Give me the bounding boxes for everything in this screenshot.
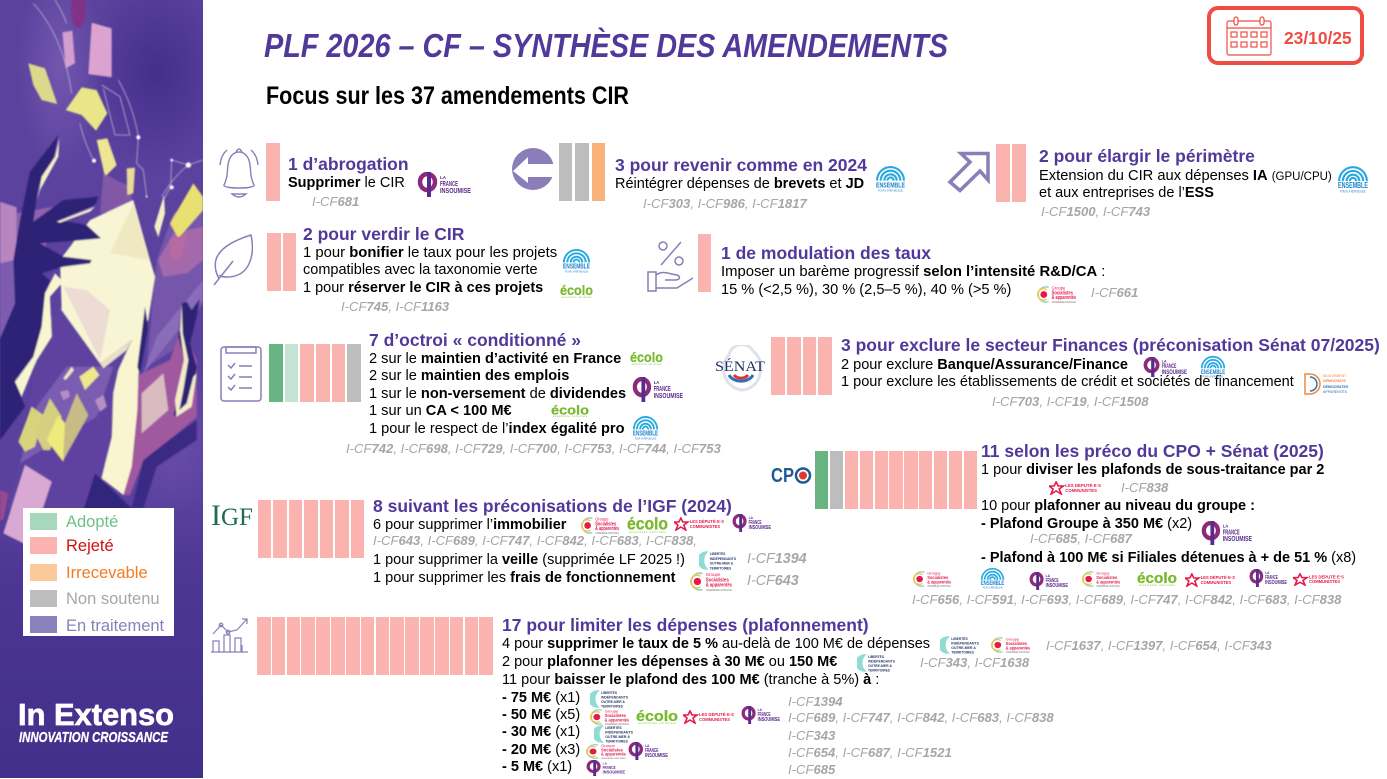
lower violet band bbox=[7, 307, 133, 508]
logo: Communistes bbox=[1293, 573, 1345, 586]
logo: LIOT: OUTRE-MER & bbox=[605, 735, 630, 739]
floating papers bbox=[88, 23, 112, 77]
text: 1 pour bonifier le taux pour les projets bbox=[303, 245, 557, 261]
logo: LIOT bbox=[594, 725, 635, 743]
icon: left arrow bbox=[512, 148, 554, 190]
logo: Ensemble bbox=[632, 415, 659, 440]
logo: Socialistes bbox=[580, 516, 620, 535]
text: 10 pour plafonner au niveau du groupe : bbox=[981, 498, 1255, 514]
status bars bbox=[266, 143, 280, 201]
logo: LIOT: OUTRE-MER & bbox=[601, 700, 625, 704]
logo: Ensemble bbox=[876, 166, 905, 192]
date badge bbox=[1207, 6, 1364, 65]
logo: LIOT: LIBERTÉS bbox=[868, 654, 884, 659]
text: - Plafond Groupe à 350 M€ (x2) bbox=[981, 516, 1192, 532]
references: I-CF685, I-CF687 bbox=[1030, 531, 1132, 546]
logo: Démocrates: APPARENTÉS bbox=[1323, 389, 1348, 394]
text: - Plafond à 100 M€ si Filiales détenues à + de 51 % (x8) bbox=[981, 550, 1356, 566]
text: 11 pour baisser le plafond des 100 M€ (tranche à 5%) à : bbox=[502, 672, 879, 688]
logo: Socialistes: ASSEMBLÉE NATIONALE bbox=[595, 532, 619, 535]
logo: La France Insoumise bbox=[418, 172, 471, 197]
icon: bell bbox=[219, 148, 259, 198]
references: I-CF343, I-CF1638 bbox=[920, 655, 1029, 670]
legend item: Irrecevable bbox=[30, 564, 148, 582]
logo: LIOT: LIBERTÉS bbox=[605, 725, 622, 730]
logo: La France Insoumise bbox=[628, 742, 668, 760]
logo: La France Insoumise: LA bbox=[1046, 574, 1051, 578]
icon: percent in hand bbox=[647, 241, 693, 292]
references: I-CF689, I-CF747, I-CF842, I-CF683, I-CF838 bbox=[788, 710, 1054, 725]
logo: Communistes bbox=[1049, 481, 1102, 495]
references: I-CF656, I-CF591, I-CF693, I-CF689, I-CF747, I-CF842, I-CF683, I-CF838 bbox=[912, 592, 1341, 607]
right wedge bbox=[147, 200, 203, 367]
logo: Socialistes bbox=[589, 708, 630, 726]
status bars bbox=[258, 500, 364, 558]
left pink band bbox=[0, 202, 17, 263]
status bars bbox=[269, 344, 361, 402]
heading: 2 pour élargir le périmètre bbox=[1039, 146, 1255, 166]
logo: La France Insoumise bbox=[632, 377, 683, 402]
logo: La France Insoumise: LA bbox=[654, 380, 660, 385]
logo: La France Insoumise: LA bbox=[749, 516, 754, 520]
legend item: Adopté bbox=[30, 513, 118, 531]
logo: La France Insoumise: FRANCE bbox=[1265, 575, 1278, 581]
logo: La France Insoumise bbox=[1201, 521, 1252, 545]
text: 2 sur le maintien d’activité en France bbox=[369, 351, 621, 367]
logo: Communistes bbox=[683, 710, 735, 724]
text: Réintégrer dépenses de brevets et JD bbox=[615, 176, 864, 192]
references: I-CF1394 bbox=[747, 551, 807, 567]
logo: LIOT: INDÉPENDANTS bbox=[605, 730, 633, 734]
panel: retour 2024 bbox=[512, 143, 905, 211]
logo: Socialistes bbox=[1036, 285, 1077, 304]
text: et aux entreprises de l’ESS bbox=[1039, 185, 1214, 201]
icon: calendar bbox=[1226, 16, 1272, 56]
legend item: Irrecevable: Irrecevable bbox=[66, 564, 148, 582]
logo: La France Insoumise: LA bbox=[1265, 571, 1270, 575]
legend item: Rejeté: Rejeté bbox=[66, 537, 114, 555]
logo: LIOT bbox=[857, 654, 897, 672]
logo: LIOT: OUTRE-MER & bbox=[710, 562, 733, 566]
logo: La France Insoumise bbox=[1029, 572, 1068, 590]
logo: Communistes: COMMUNISTES bbox=[1201, 580, 1231, 586]
logo: LIOT: OUTRE-MER & bbox=[868, 664, 892, 668]
heading: 2 pour verdir le CIR bbox=[303, 224, 464, 244]
logo: LIOT: LIBERTÉS bbox=[951, 636, 968, 641]
logo: Socialistes bbox=[1081, 570, 1121, 588]
logo: Socialistes bbox=[585, 743, 627, 760]
logo: Communistes: COMMUNISTES bbox=[1065, 488, 1098, 494]
logo: LIOT bbox=[699, 551, 738, 570]
text: 15 % (<2,5 %), 30 % (2,5–5 %), 40 % (>5 %) bbox=[721, 282, 1011, 298]
logo: La France Insoumise: LA bbox=[645, 744, 650, 748]
logo: Socialistes bbox=[912, 570, 952, 588]
references: I-CF1500, I-CF743 bbox=[1041, 204, 1150, 219]
logo: La France Insoumise: LA bbox=[603, 762, 608, 765]
heading: 7 d’octroi « conditionné » bbox=[369, 330, 581, 350]
text: 1 pour le respect de l’index égalité pro bbox=[369, 421, 625, 437]
logo: La France Insoumise bbox=[1143, 357, 1187, 377]
references: I-CF1637, I-CF1397, I-CF654, I-CF343 bbox=[1046, 638, 1272, 653]
heading: 3 pour revenir comme en 2024 bbox=[615, 155, 867, 175]
small lower items bbox=[79, 367, 99, 390]
logo: Socialistes bbox=[689, 571, 733, 592]
logo: La France Insoumise bbox=[732, 514, 771, 532]
logo: Socialistes bbox=[990, 636, 1031, 654]
logo: Ensemble bbox=[1338, 166, 1368, 193]
logo: Socialistes: Groupe bbox=[927, 571, 941, 575]
logo: La France Insoumise: FRANCE bbox=[645, 748, 659, 754]
legend item: Adopté: Adopté bbox=[66, 513, 118, 531]
icon: growth chart bbox=[210, 618, 249, 653]
status bars bbox=[267, 233, 296, 291]
logo: La France Insoumise: LA bbox=[758, 708, 763, 712]
text: 1 pour supprimer les frais de fonctionnement bbox=[373, 570, 676, 586]
logo: La France Insoumise: FRANCE bbox=[1046, 578, 1059, 584]
logo: Communistes bbox=[674, 517, 725, 531]
logo: La France Insoumise: LA bbox=[1223, 524, 1228, 529]
logo: Socialistes: ASSEMBLÉE NATIONALE bbox=[706, 587, 732, 592]
references: I-CF703, I-CF19, I-CF1508 bbox=[992, 394, 1148, 409]
logo: Socialistes: Groupe bbox=[1096, 571, 1110, 575]
references: I-CF1394 bbox=[788, 694, 843, 709]
status bars bbox=[996, 144, 1026, 202]
references: I-CF303, I-CF986, I-CF1817 bbox=[643, 196, 807, 211]
text: Supprimer le CIR bbox=[288, 175, 405, 191]
central crystal bbox=[60, 200, 155, 363]
text: 1 pour exclure les établissements de crédit et sociétés de financement bbox=[841, 374, 1294, 390]
logo: IGF: IGF bbox=[211, 499, 253, 532]
logo: LIOT: INDÉPENDANTS bbox=[951, 641, 979, 645]
logo: Socialistes: Groupe bbox=[1052, 286, 1066, 291]
heading: 17 pour limiter les dépenses (plafonnement) bbox=[502, 615, 869, 635]
left hand bbox=[0, 135, 101, 440]
legend item: Rejeté bbox=[30, 537, 114, 555]
icon: leaf bbox=[214, 234, 253, 286]
logo: Communistes bbox=[1185, 573, 1236, 587]
logo: LIOT: OUTRE-MER & bbox=[951, 646, 976, 650]
panel: secteur finances bbox=[715, 335, 1385, 412]
text: Extension du CIR aux dépenses IA (GPU/CPU) bbox=[1039, 168, 1332, 184]
logo: Ensemble bbox=[563, 249, 590, 273]
logo: La France Insoumise bbox=[741, 706, 780, 724]
text: 4 pour supprimer le taux de 5 % au-delà de 100 M€ de dépenses bbox=[502, 636, 930, 652]
panel: abrogation bbox=[219, 143, 471, 209]
legend item: En traitement: En traitement bbox=[66, 617, 164, 635]
logo: La France Insoumise: FRANCE bbox=[749, 520, 762, 526]
logo: La France Insoumise: FRANCE bbox=[758, 712, 771, 718]
text: 1 pour diviser les plafonds de sous-traitance par 2 bbox=[981, 462, 1324, 478]
text: - 30 M€ (x1) bbox=[502, 724, 580, 740]
text: 2 sur le maintien des emplois bbox=[369, 368, 569, 384]
logo: Socialistes: Groupe bbox=[1006, 637, 1020, 641]
text: 6 pour supprimer l’immobilier bbox=[373, 517, 566, 533]
logo: Ensemble bbox=[980, 567, 1005, 589]
logo: Ensemble bbox=[1200, 355, 1226, 378]
sidebar illustration bbox=[0, 0, 203, 778]
logo: CPO bbox=[771, 464, 812, 486]
panel: préconisations IGF bbox=[210, 495, 775, 595]
logo: LIOT bbox=[590, 690, 630, 708]
logo: La France Insoumise: LA bbox=[1162, 360, 1167, 364]
panel: CPO et Sénat bbox=[770, 440, 1370, 610]
status bars bbox=[257, 617, 493, 675]
references: I-CF643, I-CF689, I-CF747, I-CF842, I-CF683, I-CF838, bbox=[373, 533, 697, 548]
logo: La France Insoumise: FRANCE bbox=[440, 179, 458, 188]
status bars bbox=[771, 337, 832, 395]
panel: verdir le CIR bbox=[214, 224, 593, 314]
references: I-CF681 bbox=[312, 194, 359, 209]
references: I-CF685 bbox=[788, 762, 835, 777]
heading: 1 d’abrogation bbox=[288, 154, 409, 174]
logo: La France Insoumise bbox=[586, 760, 625, 776]
logo: Communistes: COMMUNISTES bbox=[690, 524, 720, 530]
references: I-CF643 bbox=[747, 573, 799, 589]
logo: La France Insoumise: FRANCE bbox=[1162, 364, 1176, 370]
panel: plafonnement des dépenses bbox=[210, 612, 1275, 778]
text: 2 pour plafonner les dépenses à 30 M€ ou 150 M€ bbox=[502, 654, 837, 670]
panel: modulation des taux bbox=[647, 234, 1138, 304]
text: 2 pour exclure Banque/Assurance/Finance bbox=[841, 357, 1128, 373]
text: 1 pour réserver le CIR à ces projets bbox=[303, 280, 543, 296]
logo: Socialistes: Groupe bbox=[595, 517, 609, 522]
logo: La France Insoumise: LA bbox=[440, 175, 447, 180]
text: - 75 M€ (x1) bbox=[502, 690, 580, 706]
sleeve bbox=[67, 473, 132, 633]
status bars bbox=[559, 143, 605, 201]
logo: Socialistes: Groupe bbox=[601, 744, 616, 748]
brand logo: In Extenso bbox=[18, 698, 174, 732]
references: I-CF343 bbox=[788, 728, 835, 743]
text: Imposer un barème progressif selon l’intensité R&D/CA : bbox=[721, 264, 1105, 280]
logo: Socialistes: Groupe bbox=[605, 709, 619, 713]
lower papers bbox=[63, 393, 88, 460]
text: 1 pour supprimer la veille (supprimée LF 2025 !) bbox=[373, 552, 685, 568]
legend item: En traitement bbox=[30, 616, 164, 635]
logo: Communistes: COMMUNISTES bbox=[1309, 579, 1340, 584]
right hand bbox=[123, 327, 197, 495]
text: - 20 M€ (x3) bbox=[502, 742, 580, 758]
references: I-CF654, I-CF687, I-CF1521 bbox=[788, 745, 952, 760]
logo: Socialistes: Groupe bbox=[706, 572, 721, 577]
icon: diagonal arrow bbox=[948, 152, 990, 193]
status bars bbox=[815, 451, 977, 509]
logo: La France Insoumise: FRANCE bbox=[1223, 528, 1240, 536]
logo: Socialistes: ASSEMBLÉE NATIONALE bbox=[1052, 301, 1076, 304]
status bars bbox=[698, 234, 711, 292]
text: compatibles avec la taxonomie verte bbox=[303, 262, 538, 278]
logo: La France Insoumise bbox=[1249, 569, 1287, 587]
references: I-CF745, I-CF1163 bbox=[341, 299, 449, 314]
logo: La France Insoumise: FRANCE bbox=[603, 765, 616, 771]
logo: Démocrates bbox=[1304, 373, 1354, 395]
logo: Sénat: SÉNAT bbox=[715, 358, 765, 375]
text: 1 sur un CA < 100 M€ bbox=[369, 403, 512, 419]
logo: La France Insoumise: FRANCE bbox=[654, 384, 671, 393]
logo: Sénat bbox=[715, 345, 766, 393]
heading: 3 pour exclure le secteur Finances (préconisation Sénat 07/2025) bbox=[841, 335, 1380, 355]
text: - 50 M€ (x5) bbox=[502, 707, 580, 723]
text: 1 sur le non-versement de dividendes bbox=[369, 386, 626, 402]
logo: LIOT: LIBERTÉS bbox=[710, 551, 726, 556]
references: I-CF838 bbox=[1121, 480, 1168, 495]
logo: Démocrates: DÉMOCRATE bbox=[1323, 378, 1346, 383]
legend item: Non soutenu: Non soutenu bbox=[66, 590, 160, 608]
heading: 11 selon les préco du CPO + Sénat (2025) bbox=[981, 441, 1324, 461]
logo: Démocrates: DÉMOCRATES bbox=[1323, 384, 1349, 389]
icon: checklist bbox=[220, 346, 262, 402]
logo: LIOT bbox=[940, 636, 981, 654]
references: I-CF742, I-CF698, I-CF729, I-CF700, I-CF753, I-CF744, I-CF753 bbox=[346, 441, 721, 456]
heading: 1 de modulation des taux bbox=[721, 243, 931, 263]
legend bbox=[23, 508, 174, 636]
text: - 5 M€ (x1) bbox=[502, 759, 572, 775]
logo: Démocrates: MOUVEMENT bbox=[1323, 374, 1347, 378]
date text: 23/10/25 bbox=[1284, 28, 1352, 48]
red smear bbox=[71, 0, 86, 28]
panel: élargir le périmètre bbox=[948, 144, 1368, 219]
heading: 8 suivant les préconisations de l’IGF (2024) bbox=[373, 496, 732, 516]
panel: octroi conditionné bbox=[218, 330, 728, 458]
constellation bbox=[33, 0, 203, 200]
logo: Communistes: COMMUNISTES bbox=[699, 717, 731, 723]
logo: LIOT: LIBERTÉS bbox=[601, 690, 617, 695]
references: I-CF661 bbox=[1091, 285, 1138, 300]
